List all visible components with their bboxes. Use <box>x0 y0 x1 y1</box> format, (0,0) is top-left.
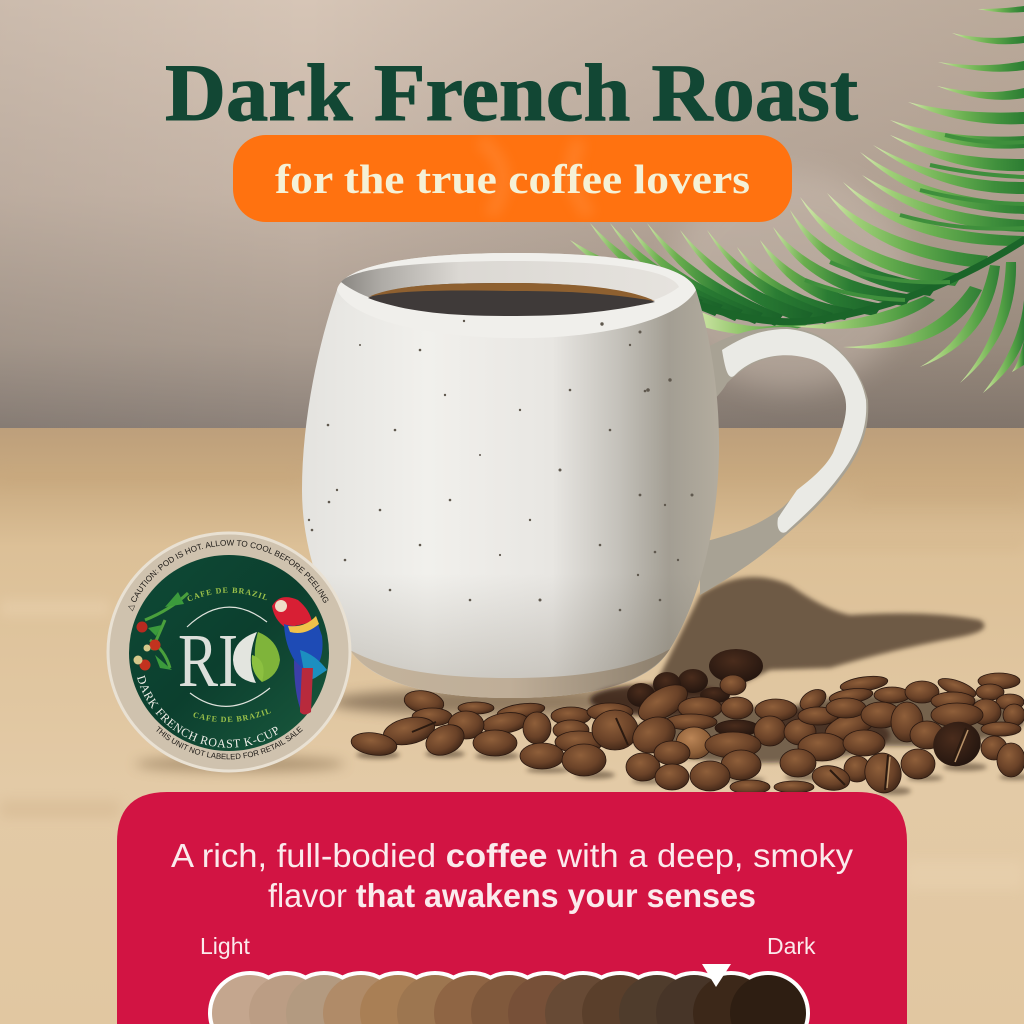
wall background <box>0 0 1024 430</box>
pod berries <box>134 592 188 670</box>
red description panel <box>117 792 907 1024</box>
pod caution text: △ CAUTION: POD IS HOT. ALLOW TO COOL BEFORE PEELING <box>128 540 328 612</box>
pod shadow <box>135 756 345 772</box>
roast marker <box>702 964 731 987</box>
pod cafe de brazil top: CAFE DE BRAZIL <box>188 588 267 601</box>
description line 1: A rich, full-bodied coffee with a deep, smoky <box>171 837 854 874</box>
pod cafe de brazil bottom: CAFE DE BRAZIL <box>194 708 271 722</box>
K-cup pod <box>106 532 352 772</box>
roast scale <box>208 971 810 1024</box>
palm frond <box>570 6 1024 393</box>
pod logo letters: RI <box>178 619 238 703</box>
mug unglazed base <box>350 649 670 698</box>
pod logo ring <box>187 607 270 706</box>
coffee beans pile <box>350 649 1024 797</box>
mug shading <box>302 253 719 698</box>
description line 2: flavor that awakens your senses <box>268 877 756 914</box>
mug rim and coffee <box>337 253 696 338</box>
pod roast name: DARK FRENCH ROAST K-CUP <box>137 675 278 748</box>
title: Dark French Roast <box>165 47 858 138</box>
pod rim <box>108 533 350 771</box>
subtitle text: for the true coffee lovers <box>275 156 750 202</box>
wooden table <box>0 428 1024 1024</box>
coffee mug <box>302 253 868 698</box>
pod logo leaf <box>233 632 280 683</box>
table shadow of mug <box>650 577 984 695</box>
mug speckles <box>308 320 694 611</box>
subtitle pill <box>233 135 792 222</box>
pod retail text: THIS UNIT NOT LABELED FOR RETAIL SALE <box>156 726 303 760</box>
mug handle <box>700 327 868 595</box>
pod parrot <box>272 597 327 714</box>
shadow under mug and beans <box>330 688 690 716</box>
mug body <box>302 253 719 698</box>
pod label <box>129 555 329 751</box>
label: dark: Dark <box>767 933 816 959</box>
label: light: Light <box>200 933 250 959</box>
